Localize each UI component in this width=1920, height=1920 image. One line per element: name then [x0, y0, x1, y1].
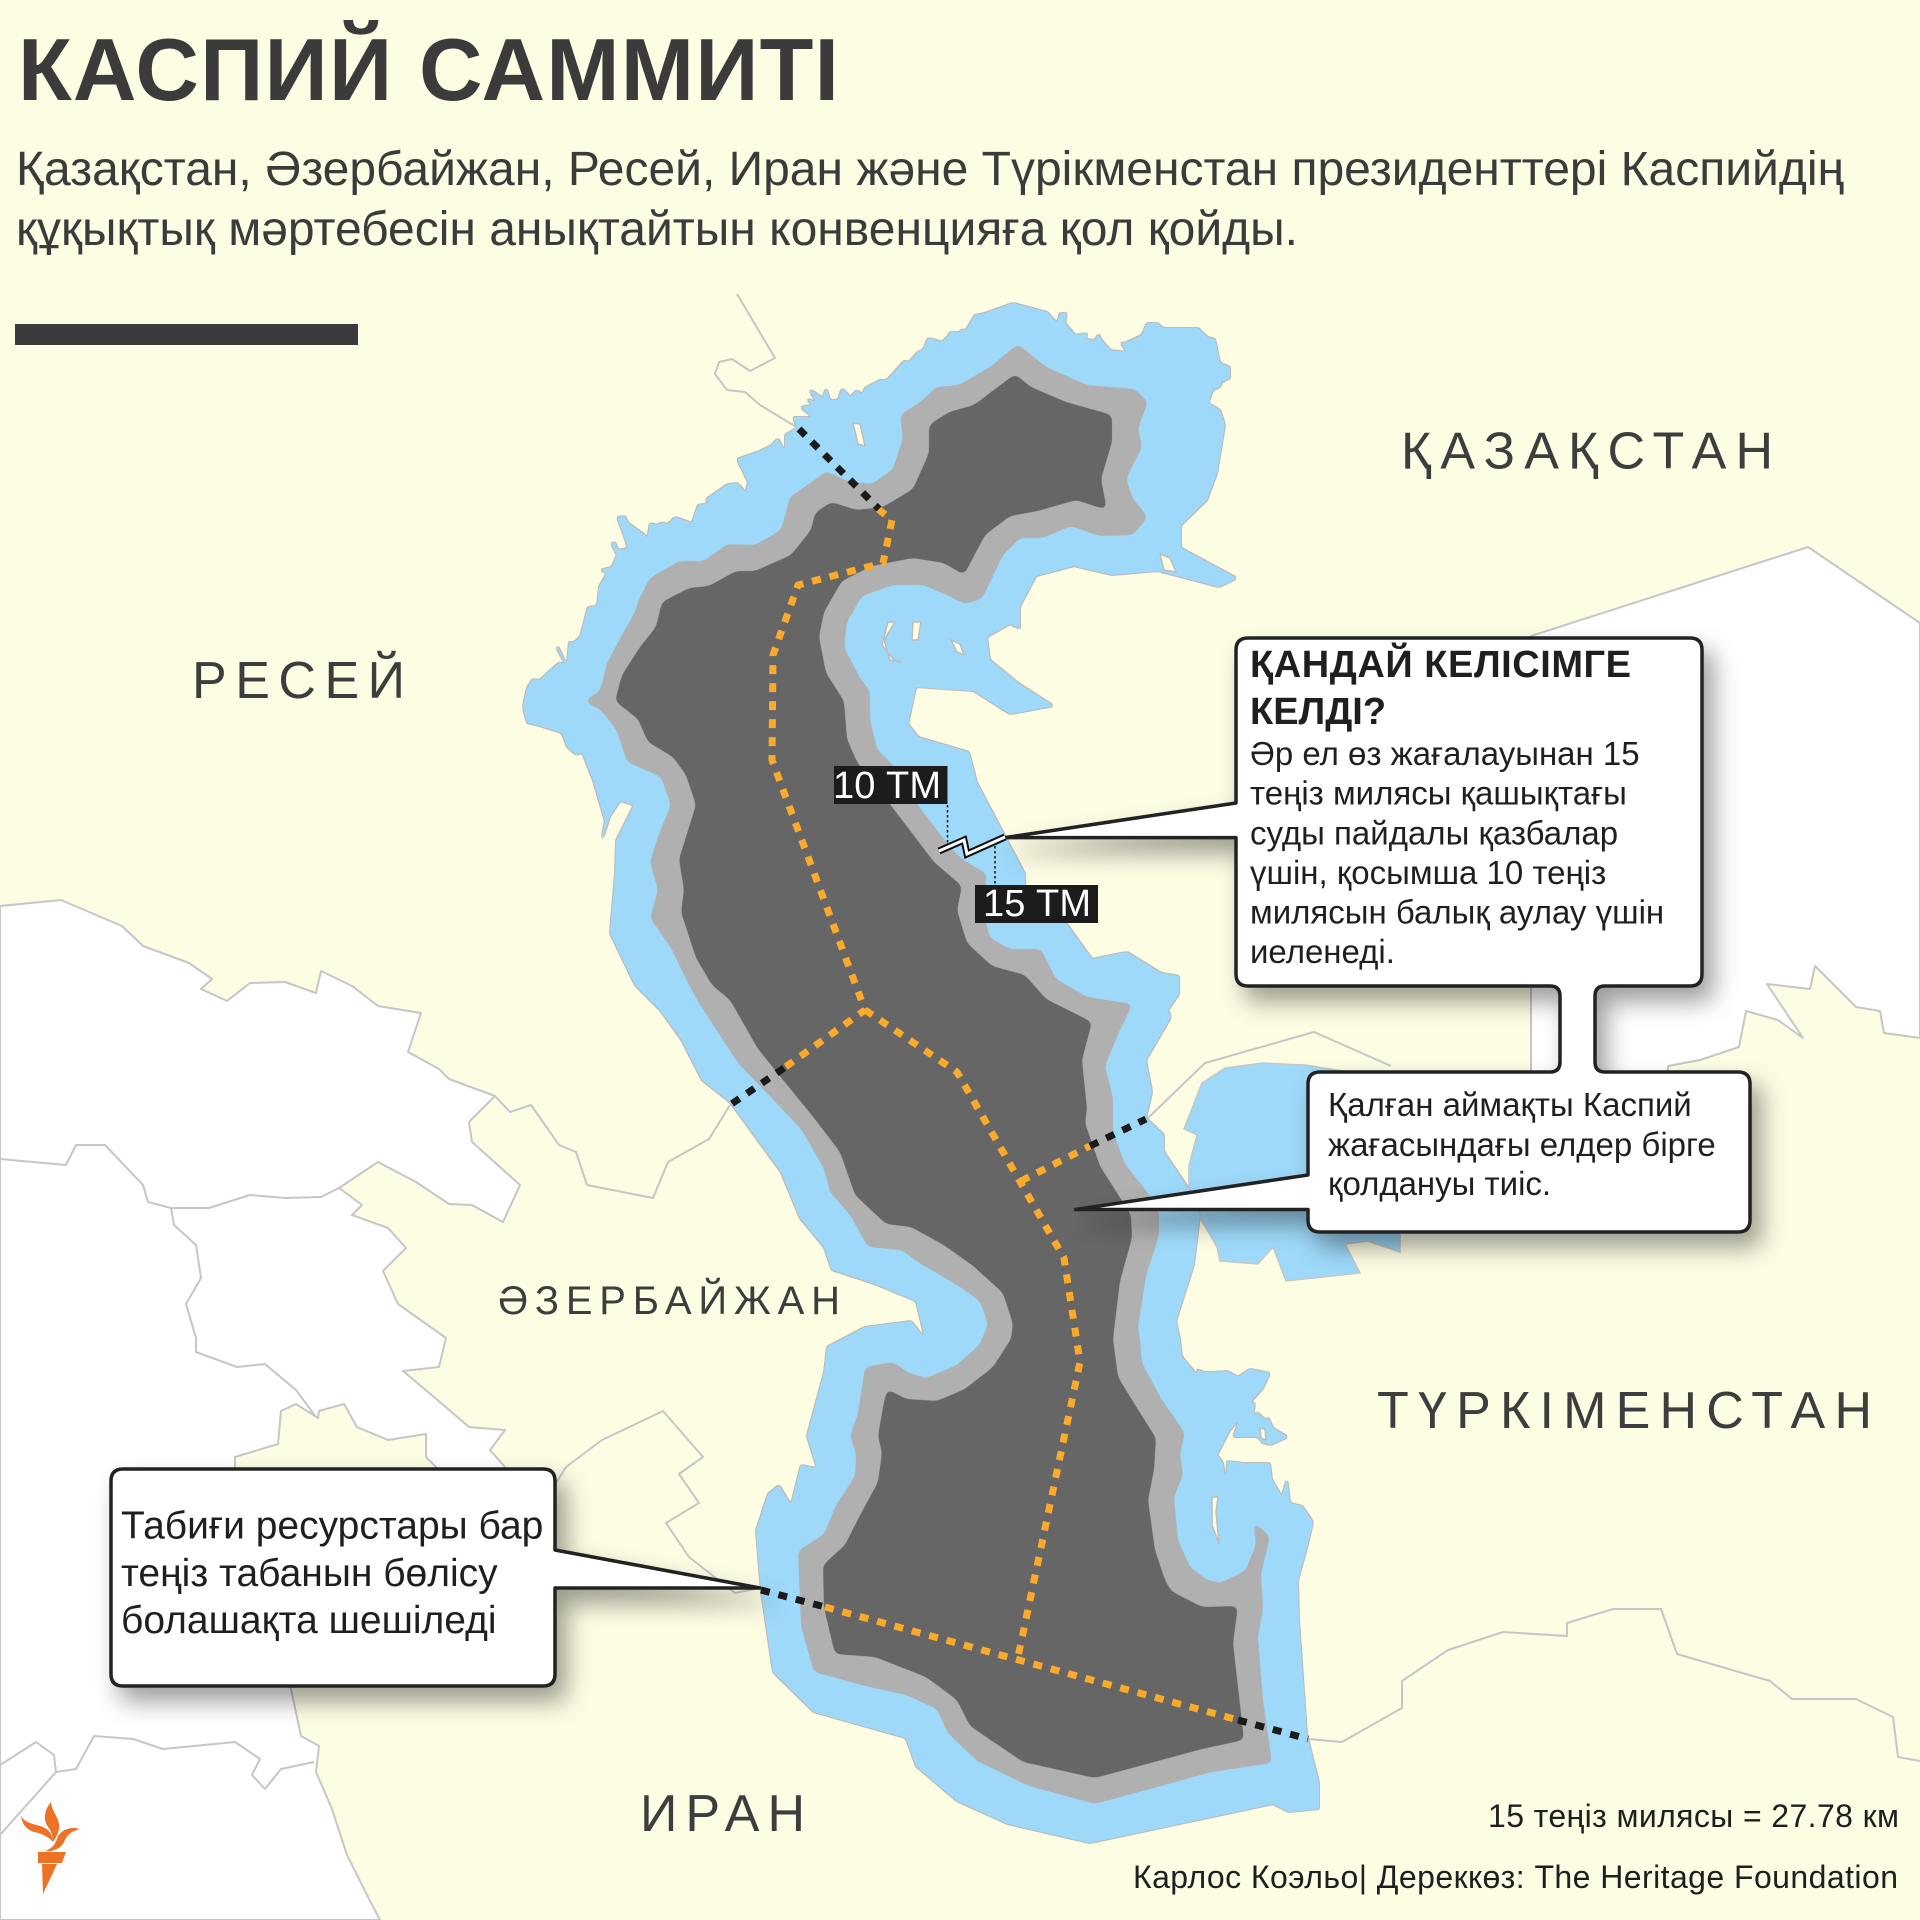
map: black sea boundary lines	[730, 429, 1308, 1739]
divider bar	[15, 324, 358, 345]
lower callout text: қолдануы тиіс.	[1328, 1165, 1551, 1202]
map: land borders	[495, 294, 1920, 1761]
callout body text: Әр ел өз жағалауынан 15	[1250, 735, 1640, 772]
callout body text: милясын балық аулау үшін	[1250, 894, 1664, 930]
icon: torch logo	[21, 1802, 80, 1894]
map: islands	[853, 423, 1266, 1544]
country label: Azerbaijan: ӘЗЕРБАЙЖАН	[498, 1277, 840, 1323]
map: gray 15-mile zone	[584, 344, 1272, 1804]
seabed callout text: Табиғи ресурстары бар	[121, 1504, 543, 1548]
lower callout text	[1328, 1086, 1716, 1202]
country label: Kazakhstan: ҚАЗАҚСТАН	[1401, 422, 1773, 480]
seabed callout text: болашақта шешіледі	[121, 1599, 497, 1642]
map: Caspian Sea water	[523, 303, 1319, 1843]
subtitle	[16, 143, 1844, 256]
source credit: Карлос Коэльо| Дереккөз: The Heritage Foundation	[1133, 1859, 1898, 1895]
map: Kara-Bogaz-Gol lagoon	[1184, 1063, 1400, 1281]
label: 10 TM: 10 ТМ	[833, 765, 941, 807]
seabed callout text	[121, 1504, 543, 1642]
callout body text: үшін, қосымша 10 теңіз	[1250, 854, 1606, 891]
country label: Turkmenistan: ТҮРКІМЕНСТАН	[1377, 1382, 1872, 1440]
conversion note: 15 теңіз милясы = 27.78 км	[1488, 1798, 1899, 1834]
callout heading: ҚАНДАЙ КЕЛІСІМГЕ	[1250, 641, 1631, 686]
zigzag marker	[939, 837, 1005, 854]
lower callout text: Қалған аймақты Каспий	[1328, 1086, 1692, 1123]
callout: agreement with shared zone callout	[1005, 638, 1750, 1232]
lower callout text: жағасындағы елдер бірге	[1328, 1126, 1716, 1163]
callout heading line 2: КЕЛДІ?	[1250, 691, 1386, 733]
callout body text	[1250, 735, 1664, 970]
callout: seabed division	[111, 1469, 760, 1686]
map: orange median lines	[772, 509, 1238, 1720]
country label: Iran: ИРАН	[640, 1785, 805, 1843]
country label: Russia: РЕСЕЙ	[192, 651, 405, 710]
callout body text: теңіз милясы қашықтағы	[1250, 774, 1627, 812]
map: neighbouring white land	[0, 547, 1920, 1920]
subtitle: құқықтық мәртебесін анықтайтын конвенцияға қол қойды.	[16, 203, 1298, 256]
title: КАСПИЙ САММИТІ	[18, 20, 839, 119]
callout body text: иеленеді.	[1250, 933, 1395, 970]
subtitle: Қазақстан, Әзербайжан, Ресей, Иран және Түрікменстан президенттері Каспийдің	[16, 143, 1844, 196]
label: 15 TM: 15 ТМ	[983, 883, 1091, 925]
callout body text: суды пайдалы қазбалар	[1250, 814, 1618, 852]
map: dark common zone	[615, 374, 1244, 1778]
dotted leaders	[948, 805, 995, 887]
seabed callout text: теңіз табанын бөлісу	[121, 1552, 498, 1595]
